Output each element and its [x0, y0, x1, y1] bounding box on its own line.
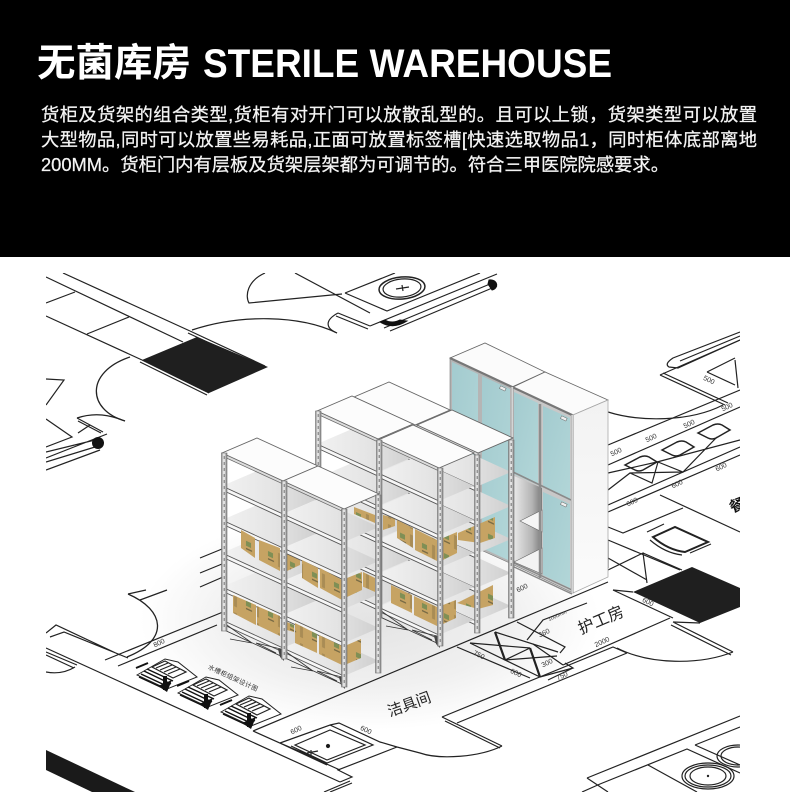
header band: [0, 0, 790, 257]
description text: 大型物品,同时可以放置些易耗品,正面可放置标签槽[快速选取物品1，同时柜体底部离地: [41, 129, 757, 150]
plan: bottom right room with basins: [582, 716, 759, 792]
title: 无菌库房: [37, 42, 191, 85]
dimension labels: 500: [645, 433, 658, 444]
shelving unit: rear left bay: [316, 396, 413, 610]
title: STERILE WAREHOUSE: [203, 42, 612, 86]
description text: 货柜及货架的组合类型,货柜有对开门可以放散乱型的。且可以上锁，货架类型可以放置: [41, 104, 757, 125]
cabinet: top panels: [450, 343, 545, 387]
dimension labels: 750: [472, 650, 485, 661]
cabinet: glass door upper right: [543, 406, 570, 500]
dimension labels: 800: [153, 638, 166, 649]
cartons: upper: [458, 517, 495, 543]
dimension labels: 600: [641, 597, 654, 608]
dimension labels: 2000: [594, 636, 611, 649]
black floor mat: right: [633, 567, 740, 623]
dimension labels: 500: [683, 419, 696, 430]
dimension labels: 360: [538, 628, 551, 639]
dimension labels: 500: [610, 447, 623, 458]
black floor mat: lower left: [46, 750, 135, 792]
cartons: lower: [391, 585, 456, 626]
description text: [41, 104, 757, 175]
cartons: middle: [302, 560, 362, 600]
floor plan drawing: [46, 273, 759, 792]
floor shading: [189, 552, 550, 706]
dimension labels: 600: [715, 462, 728, 473]
dimension labels: 1000mm: [547, 609, 568, 623]
plan: central corridor walls: [253, 582, 733, 757]
description text: 200MM。货柜门内有层板及货架层架都为可调节的。符合三甲医院院感要求。: [41, 154, 669, 175]
label: appliance caption: 水槽柜组架设计图: [207, 662, 259, 693]
cabinet: glass door upper left: [514, 392, 538, 485]
shelving unit: front row left bay: [222, 438, 318, 661]
plan: left wall stubs: [46, 379, 125, 470]
cartons: lower: [457, 585, 493, 609]
mark: partial room text right: 餐: [727, 494, 747, 517]
icons: three appliances: [136, 659, 281, 729]
dimension labels: 500: [702, 375, 715, 386]
shelving unit: rear right bay: [354, 382, 450, 596]
title: [37, 42, 612, 86]
dimension labels: 600: [290, 725, 303, 736]
room label: nursing room: 护工房: [575, 603, 627, 638]
cabinet: open lower compartment: [514, 476, 542, 572]
dimension labels: 750: [556, 671, 569, 682]
plan: top sink area: [247, 273, 497, 331]
floor drain unit: [253, 723, 397, 770]
room label: cleaning room: 洁具间: [385, 689, 434, 720]
cabinet: right block front: [450, 358, 574, 594]
dimension labels: 500: [721, 402, 734, 413]
dimension labels: [153, 375, 734, 736]
dimension labels: 600: [359, 725, 372, 736]
dimension labels: 600: [509, 668, 522, 679]
plan: top left corridor: [46, 273, 370, 421]
icon: chair: [647, 524, 711, 555]
dimension labels: 300: [541, 658, 554, 669]
dimension labels: 600: [516, 583, 529, 594]
cartons: bottom: [233, 595, 294, 636]
shelving unit: front right bay: [415, 410, 514, 633]
plan: right upper capsule and counter: [608, 332, 740, 533]
shelving unit: front row right bay: [282, 466, 381, 689]
cartons: bottom: [295, 623, 361, 665]
cartons: middle: [241, 530, 300, 571]
dimension labels: 600: [626, 497, 639, 508]
black floor mat: upper left: [142, 337, 268, 393]
icon: black pipe end left: [92, 437, 104, 449]
cabinet: left block front: [450, 358, 512, 564]
cabinet: glass door lower right: [543, 492, 570, 588]
shelving unit: front left bay: [376, 425, 474, 648]
icons: three sink pockets: [625, 424, 730, 471]
plan: left lower walls and door: [46, 549, 397, 792]
cartons: upper: [397, 520, 457, 561]
plan: right lower box: [608, 540, 682, 592]
sterile cabinet: [450, 343, 608, 594]
dimension labels: 600: [671, 479, 684, 490]
icon: black pipe end top: [380, 280, 497, 326]
cabinet: side panel: [573, 400, 608, 593]
